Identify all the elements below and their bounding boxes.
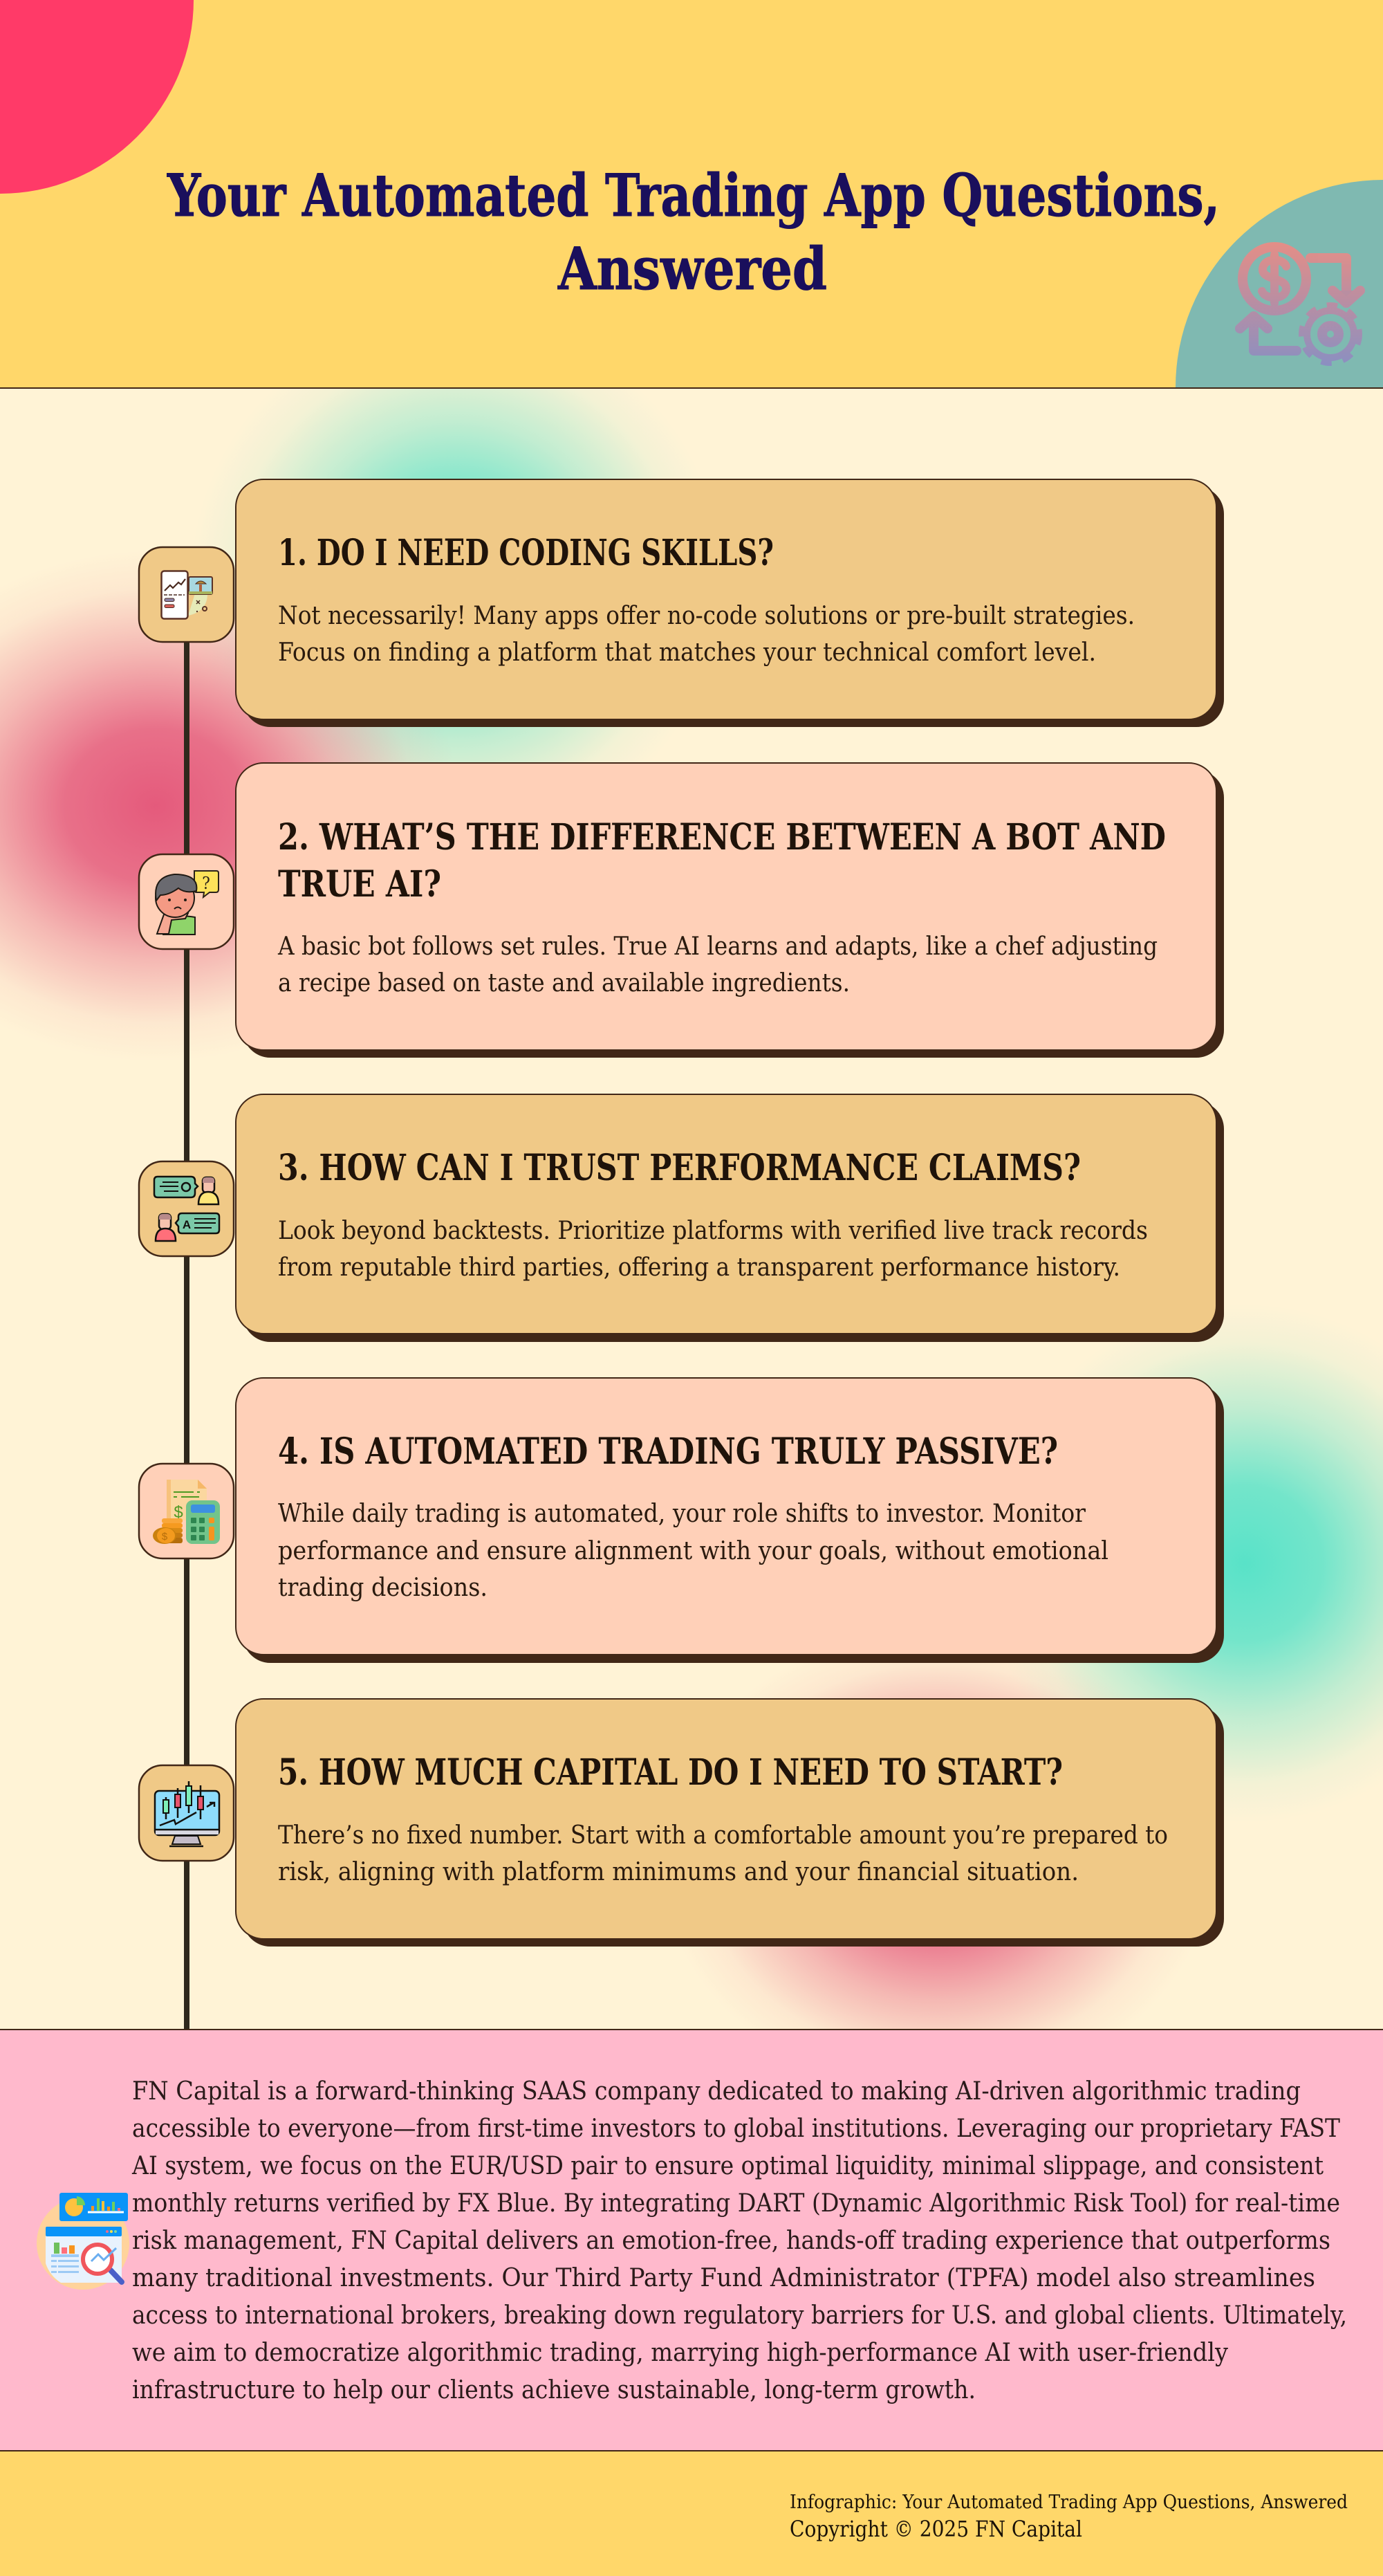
footer copyright: Copyright © 2025 FN Capital — [790, 2516, 1082, 2542]
answer 5: There’s no fixed number. Start with a comfortable amount you’re prepared to — [278, 1821, 1168, 1850]
about section — [0, 2029, 1383, 2451]
answer 1: Not necessarily! Many apps offer no-code solutions or pre-built strategies. — [278, 602, 1135, 630]
about text — [131, 2077, 1347, 2404]
heading 1: 1. DO I NEED CODING SKILLS? — [278, 532, 774, 574]
header corner circle: teal — [1176, 180, 1383, 387]
answer 3: from reputable third parties, offering a transparent performance history. — [278, 1253, 1120, 1282]
about text: risk management, FN Capital delivers an emotion-free, hands-off trading experience that outperforms — [132, 2227, 1330, 2255]
header band — [0, 0, 1383, 389]
answer 1 — [278, 602, 1135, 667]
answer 4: While daily trading is automated, your role shifts to investor. Monitor — [278, 1500, 1086, 1528]
about text: accessible to everyone—from first-time investors to global institutions. Leveraging our proprietary FAST — [132, 2115, 1340, 2143]
heading 2: TRUE AI? — [278, 863, 441, 905]
title: Your Automated Trading App Questions, — [167, 161, 1220, 230]
answer 5: risk, aligning with platform minimums and your financial situation. — [278, 1858, 1079, 1886]
icon badge 2: thinking person — [139, 854, 234, 949]
icon badge 4: invoice, coins and calculator — [139, 1464, 234, 1558]
icon badge 2: thinking person: ? — [202, 874, 210, 893]
answer 2: a recipe based on taste and available ingredients. — [278, 969, 850, 997]
about text: many traditional investments. Our Third Party Fund Administrator (TPFA) model also streamlines — [132, 2264, 1315, 2292]
heading 5: 5. HOW MUCH CAPITAL DO I NEED TO START? — [278, 1751, 1063, 1794]
answer 3: Look beyond backtests. Prioritize platforms with verified live track records — [278, 1217, 1148, 1245]
title: Answered — [557, 234, 827, 303]
footer — [0, 2450, 1383, 2576]
panel: question 4 — [236, 1378, 1224, 1663]
about text: infrastructure to help our clients achieve sustainable, long-term growth. — [132, 2376, 976, 2404]
icon badge 4: invoice, coins and calculator: $ — [162, 1531, 168, 1543]
about text: FN Capital is a forward-thinking SAAS company dedicated to making AI-driven algorithmic trading — [132, 2077, 1301, 2106]
answer 4: performance and ensure alignment with your goals, without emotional — [278, 1537, 1108, 1565]
heading 3: 3. HOW CAN I TRUST PERFORMANCE CLAIMS? — [278, 1147, 1081, 1189]
about text: monthly returns verified by FX Blue. By integrating DART (Dynamic Algorithmic Risk Tool) for real-time — [132, 2189, 1340, 2218]
panel: question 2 — [236, 763, 1224, 1058]
heading 4: 4. IS AUTOMATED TRADING TRULY PASSIVE? — [278, 1430, 1058, 1473]
icon badge 5: candlestick monitor — [139, 1765, 234, 1861]
background glow: teal top — [190, 315, 723, 847]
page background — [0, 389, 1383, 2030]
answer 2: A basic bot follows set rules. True AI learns and adapts, like a chef adjusting — [277, 932, 1158, 961]
background glow: pink left — [0, 550, 460, 1062]
timeline line — [184, 643, 189, 2030]
background glow: teal right — [985, 1304, 1383, 1823]
icon: analytics dashboard — [37, 2193, 129, 2290]
icon: money and gear cycle — [1240, 247, 1360, 360]
panel: question 1 — [236, 479, 1224, 727]
answer 4 — [278, 1500, 1108, 1602]
answer 4: trading decisions. — [278, 1574, 488, 1602]
footer credit: Infographic: Your Automated Trading App Questions, Answered — [790, 2492, 1348, 2513]
icon badge 1: phone chart — [139, 547, 234, 642]
icon badge 3: questions and answers — [139, 1161, 234, 1256]
answer 1: Focus on finding a platform that matches your technical comfort level. — [278, 638, 1096, 667]
heading 2: 2. WHAT’S THE DIFFERENCE BETWEEN A BOT AND — [278, 816, 1166, 858]
panel: question 5 — [236, 1699, 1224, 1947]
about text: we aim to democratize algorithmic trading, marrying high-performance AI with user-friendly — [132, 2339, 1229, 2367]
about text: AI system, we focus on the EUR/USD pair to ensure optimal liquidity, minimal slippage, and consistent — [131, 2152, 1324, 2180]
about text: access to international brokers, breaking down regulatory barriers for U.S. and global clients. Ultimately, — [132, 2301, 1347, 2330]
icon badge 4: invoice, coins and calculator: $ — [174, 1503, 183, 1522]
title — [167, 161, 1220, 303]
header corner circle: red — [0, 0, 194, 194]
answer 3 — [278, 1217, 1148, 1282]
heading 2 — [278, 816, 1166, 905]
icon badge 3: questions and answers: A — [183, 1218, 191, 1231]
background glow: pink bottom — [660, 1629, 1214, 2092]
answer 2 — [277, 932, 1158, 997]
panel: question 3 — [236, 1094, 1224, 1342]
answer 5 — [278, 1821, 1168, 1886]
